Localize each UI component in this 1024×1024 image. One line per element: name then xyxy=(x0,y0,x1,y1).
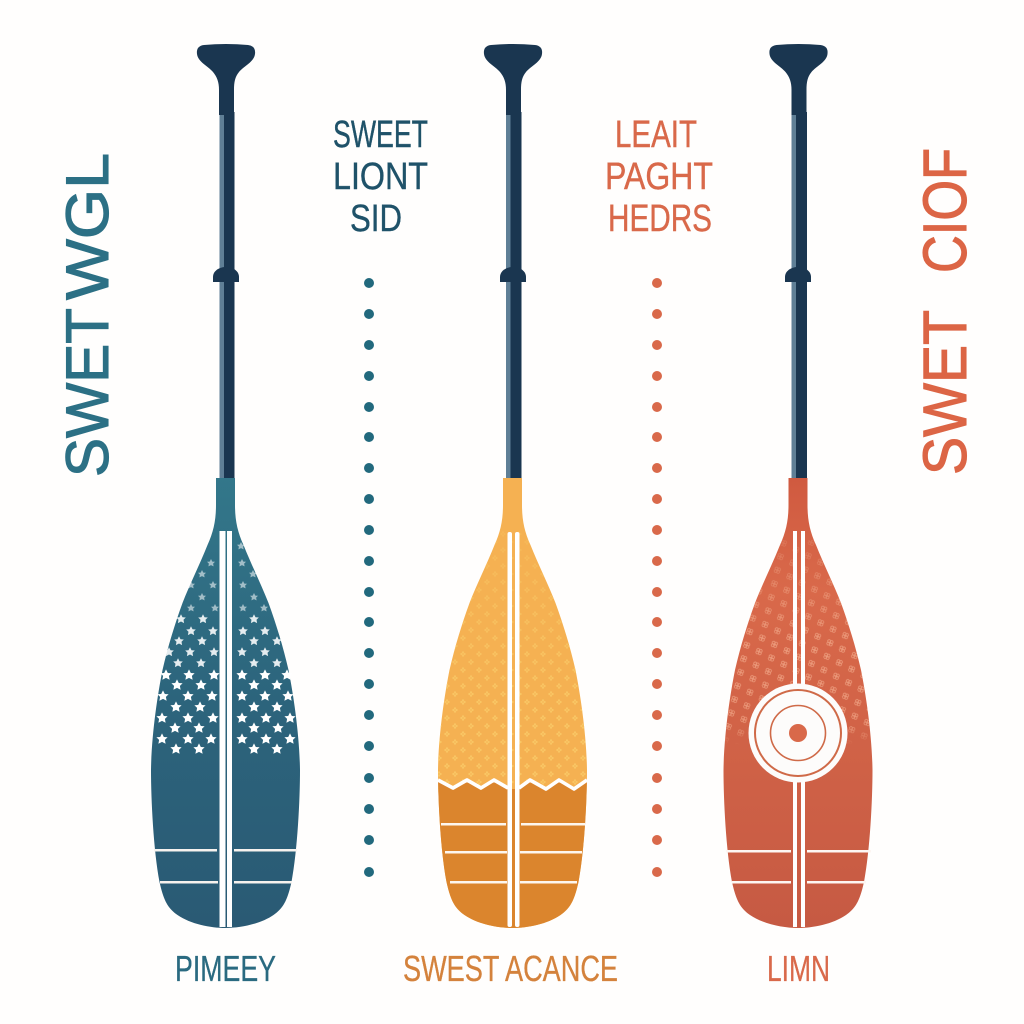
lower band xyxy=(438,782,587,928)
blade xyxy=(724,478,872,928)
shaft xyxy=(197,44,255,478)
shaft xyxy=(484,44,542,478)
right vertical heading xyxy=(911,148,979,475)
right vertical heading: CIOF xyxy=(911,148,979,273)
cross lines xyxy=(154,849,297,884)
shaft xyxy=(769,44,828,478)
cross lines xyxy=(441,823,585,884)
centre-left text block: SID xyxy=(350,198,402,240)
centre-right text block: LEAIT xyxy=(615,114,697,156)
centre stripes xyxy=(220,531,232,927)
target xyxy=(748,684,848,782)
centre stripes xyxy=(508,532,520,927)
right vertical heading: SWET xyxy=(911,310,979,475)
centre-left text block xyxy=(333,114,428,240)
dot pattern xyxy=(438,542,586,792)
wave line xyxy=(438,780,587,789)
label: paddle 1: PIMEEY xyxy=(175,948,276,989)
dotted line: teal xyxy=(364,278,374,877)
paddle 2: orange with wave xyxy=(438,44,587,928)
label: paddle 3: LIMN xyxy=(767,948,830,989)
floret pattern xyxy=(725,540,870,742)
centre-left text block: SWEET xyxy=(333,114,428,156)
label: paddle 2: SWEST ACANCE xyxy=(403,948,618,989)
left vertical heading xyxy=(54,153,121,477)
blade xyxy=(438,478,587,928)
centre-right text block: PAGHT xyxy=(605,156,713,198)
centre stripes xyxy=(793,531,805,927)
paddle 3: red with target xyxy=(724,44,872,928)
blade xyxy=(151,478,300,928)
centre-right text block: HEDRS xyxy=(608,198,712,240)
left vertical heading: SWET xyxy=(54,308,121,477)
cross lines xyxy=(726,850,871,884)
centre-right text block xyxy=(605,114,713,240)
centre-left text block: LIONT xyxy=(333,156,428,198)
left vertical heading: WGL xyxy=(54,153,121,300)
paddle 1: teal with stars xyxy=(151,44,300,928)
stars xyxy=(156,542,296,754)
dotted line: red xyxy=(652,278,662,877)
